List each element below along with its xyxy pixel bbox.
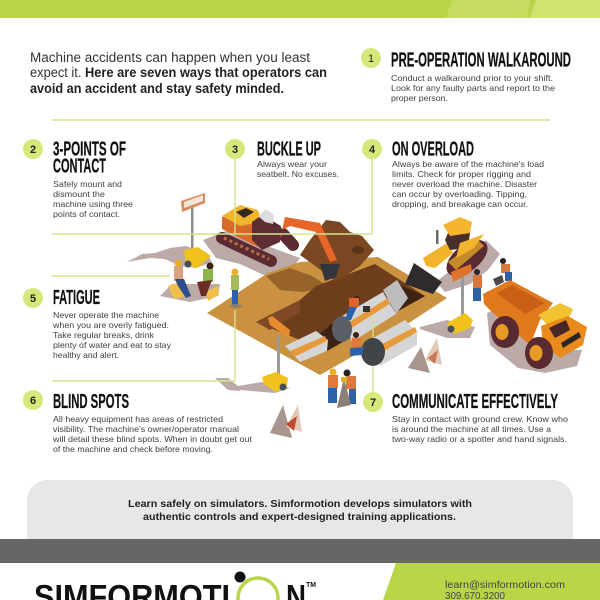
step 2: 3-points of contact: 3-POINTS OF: [53, 138, 126, 160]
step 6: blind spots: 6: [30, 395, 36, 407]
step 4: on overload: Always be aware of the machine's load: [392, 160, 544, 169]
step 7: communicate effectively: 7: [370, 397, 376, 409]
connector lines: [52, 120, 550, 402]
step 5: fatigue: when you are overly fatigued.: [52, 321, 169, 330]
step 6: blind spots: All heavy equipment has areas of restricted: [53, 415, 223, 424]
step 3: buckle up: Always wear your: [257, 160, 327, 169]
step 7: communicate effectively: two-way radio or a spotter and hand signals.: [392, 435, 567, 444]
step 4: on overload: limits. Check for proper rigging and: [392, 170, 531, 179]
step 2: 3-points of contact: Safely mount and: [53, 180, 122, 189]
step 4: on overload: 4: [369, 144, 376, 156]
intro text: expect it. Here are seven ways that operators can: [30, 65, 327, 80]
step 4: on overload: dropping, and breakage can occur.: [392, 200, 528, 209]
step 7: communicate effectively: [363, 391, 568, 444]
step 3: buckle up: seatbelt. No excuses.: [257, 170, 339, 179]
light tower centre: [262, 316, 290, 392]
step 5: fatigue: FATIGUE: [53, 287, 100, 309]
step 4: on overload: can occur by overloading. Tipping,: [392, 190, 527, 199]
intro text: avoid an accident and stay safety minded.: [30, 81, 284, 96]
step 5: fatigue: healthy and alert.: [53, 351, 119, 360]
step 7: communicate effectively: Stay in contact with ground crew. Know who: [392, 415, 568, 424]
top banner: [0, 0, 600, 18]
step 6: blind spots: [23, 390, 253, 454]
pit: [256, 264, 425, 352]
step 2: 3-points of contact: dismount the: [53, 190, 105, 199]
excavator: [222, 205, 340, 281]
step 5: fatigue: Never operate the machine: [53, 311, 159, 320]
barrier cones right: [408, 338, 442, 373]
ground shadows: [127, 231, 582, 393]
step 2: 3-points of contact: [23, 138, 133, 219]
step 2: 3-points of contact: CONTACT: [53, 156, 106, 178]
step 1: pre-operation walkaround: Conduct a walkaround prior to your shift.: [391, 74, 553, 83]
step 6: blind spots: will detail these blind spots. When in doubt get out: [52, 435, 253, 444]
bulldozer: [405, 217, 494, 294]
simulator callout panel: [27, 480, 573, 540]
footer contact block: [383, 563, 600, 600]
step 5: fatigue: Take regular breaks, drink: [53, 331, 155, 340]
step 2: 3-points of contact: 2: [30, 144, 36, 156]
step 1: pre-operation walkaround: [361, 48, 571, 103]
step 3: buckle up: [225, 138, 339, 179]
workers right: [473, 258, 512, 301]
barrier cones front: [270, 405, 302, 438]
intro text: [30, 50, 327, 96]
step 5: fatigue: plenty of water and eat to stay: [53, 341, 172, 350]
step 7: communicate effectively: is around the machine at all times. Use a: [392, 425, 551, 434]
dump truck: [483, 280, 587, 369]
workers at pipes: [345, 296, 370, 356]
step 3: buckle up: 3: [232, 144, 238, 156]
step 2: 3-points of contact: points of contact.: [53, 210, 120, 219]
light tower right: [447, 264, 473, 334]
step 5: fatigue: 5: [30, 293, 36, 305]
seated workers: [168, 260, 219, 301]
pipes: [285, 280, 417, 366]
step 1: pre-operation walkaround: Look for any faulty parts and report to the: [391, 84, 555, 93]
illustration: construction site: [127, 193, 587, 438]
logo: TM: [306, 582, 316, 589]
step 6: blind spots: of the machine and check before moving.: [53, 445, 213, 454]
step 6: blind spots: BLIND SPOTS: [53, 391, 129, 413]
dark band: [0, 539, 600, 563]
intro text: Machine accidents can happen when you least: [30, 50, 310, 65]
step 6: blind spots: visibility. The machine's owner/operator manual: [53, 425, 239, 434]
step 2: 3-points of contact: machine using three: [53, 200, 133, 209]
dirt mound: [300, 220, 374, 282]
standing worker left: [230, 268, 242, 308]
step 4: on overload: ON OVERLOAD: [392, 138, 474, 160]
step 5: fatigue: [23, 287, 172, 360]
step 4: on overload: never overload the machine. Disaster: [392, 180, 537, 189]
footer contact block: learn@simformotion.com: [445, 580, 565, 591]
step 3: buckle up: BUCKLE UP: [257, 138, 321, 160]
surveyors: [328, 368, 356, 408]
logo: [34, 572, 316, 600]
dirt ground: [207, 257, 447, 375]
step 1: pre-operation walkaround: proper person.: [391, 94, 448, 103]
simulator callout panel: Learn safely on simulators. Simformotion develops simulators with: [128, 498, 472, 510]
light tower left: [181, 193, 211, 268]
step 1: pre-operation walkaround: 1: [368, 53, 374, 65]
simulator callout panel: authentic controls and expert-designed training applications.: [143, 511, 456, 523]
step 4: on overload: [362, 138, 544, 209]
